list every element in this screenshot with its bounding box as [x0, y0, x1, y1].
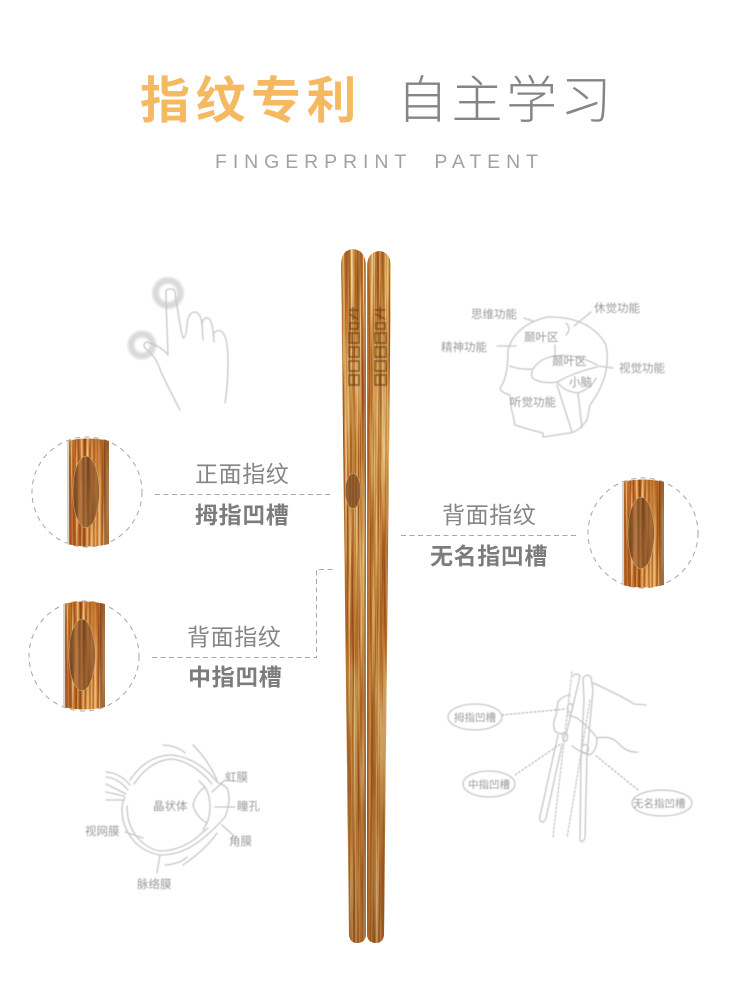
bubble text: 无名指凹槽: 无名指凹槽	[633, 797, 686, 810]
callout: middle finger groove	[29, 570, 333, 713]
label: 听觉功能: 听觉功能	[510, 395, 556, 409]
bubble text: 中指凹槽: 中指凹槽	[468, 778, 510, 791]
label: 颞叶区 lower: 颞叶区	[552, 355, 586, 368]
label: 小脑: 小脑	[569, 376, 592, 389]
circle detail: thumb groove	[32, 436, 142, 550]
label: 视网膜: 视网膜	[85, 824, 120, 838]
label: 角膜: 角膜	[229, 835, 252, 848]
label: 休觉功能: 休觉功能	[594, 301, 640, 315]
label: 颞叶区 upper: 颞叶区	[524, 331, 558, 344]
title: 自主学习: 自主学习	[397, 72, 615, 129]
chopstick pair	[339, 247, 393, 945]
title: 指纹专利: 指纹专利	[140, 73, 362, 129]
label: 无名指凹槽: 无名指凹槽	[430, 543, 548, 569]
leader line	[152, 570, 333, 658]
leader line	[155, 494, 331, 496]
chopstick: right	[367, 251, 391, 943]
label: 拇指凹槽: 拇指凹槽	[195, 502, 289, 528]
label: 瞳孔: 瞳孔	[237, 799, 260, 813]
chopstick: left	[341, 249, 366, 943]
leader line	[401, 534, 578, 536]
label bubble: 中指凹槽	[463, 771, 515, 797]
callout: ring finger groove	[401, 477, 698, 591]
circle detail: ring finger groove	[588, 477, 698, 591]
label: 视觉功能: 视觉功能	[619, 361, 665, 375]
label: 思维功能: 思维功能	[471, 307, 517, 321]
engraving: right	[375, 307, 386, 385]
diagram: chopstick grip	[448, 672, 692, 842]
engraving: left	[349, 307, 359, 385]
label bubble: 拇指凹槽	[448, 704, 502, 730]
diagram: brain functions	[441, 301, 665, 437]
label: 精神功能: 精神功能	[441, 340, 487, 354]
finger groove: thumb	[345, 473, 361, 509]
label: 背面指纹: 背面指纹	[187, 624, 281, 650]
label: 中指凹槽: 中指凹槽	[188, 664, 282, 690]
callout: thumb groove	[32, 436, 331, 550]
label: 背面指纹: 背面指纹	[442, 502, 536, 528]
diagram: eye anatomy	[85, 745, 260, 891]
label: 虹膜: 虹膜	[225, 771, 248, 784]
label: 正面指纹: 正面指纹	[195, 461, 289, 487]
label: 晶状体: 晶状体	[153, 799, 188, 813]
label: 脉络膜: 脉络膜	[137, 877, 172, 891]
subtitle: FINGERPRINT PATENT: FINGERPRINT PATENT	[215, 151, 538, 173]
label bubble: 无名指凹槽	[632, 790, 692, 816]
icon: hand with touch rings	[131, 280, 228, 410]
page canvas	[28, 74, 698, 943]
circle detail: middle finger groove	[29, 599, 139, 713]
bubble text: 拇指凹槽: 拇指凹槽	[454, 711, 496, 724]
